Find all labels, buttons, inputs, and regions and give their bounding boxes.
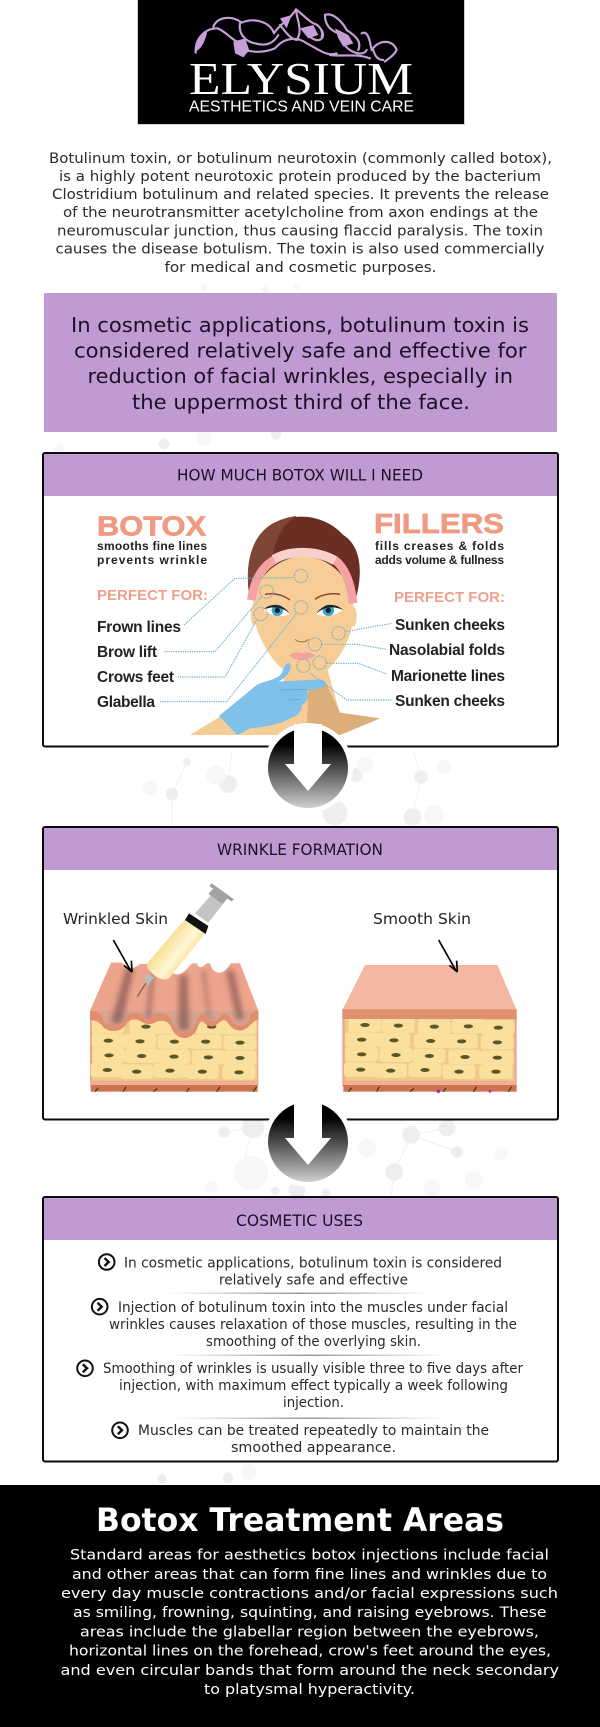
panel header: WRINKLE FORMATION (217, 840, 383, 859)
panel: wrinkle formation (43, 827, 558, 1120)
panel header (44, 828, 557, 870)
panel header (44, 454, 557, 496)
treatment areas text block: as smiling, frowning, squinting, and raising eyebrows. These (73, 1605, 546, 1621)
intro text block: neuromuscular junction, thus causing flaccid paralysis. The toxin (57, 224, 543, 240)
panel header: COSMETIC USES (236, 1211, 363, 1230)
intro text block: for medical and cosmetic purposes. (164, 260, 436, 276)
callout: cosmetic applications (44, 293, 557, 432)
label: wrinkled skin: Wrinkled Skin (63, 910, 168, 928)
botox column (97, 510, 208, 711)
bullet 2 (92, 1299, 517, 1350)
treatment areas text block: areas include the glabellar region between the eyebrows, (80, 1624, 539, 1640)
fillers column: Sunken cheeks (395, 617, 505, 634)
intro text block: Clostridium botulinum and related species. It prevents the release (52, 187, 549, 203)
treatment areas text block: to platysmal hyperactivity. (204, 1682, 415, 1698)
intro text block: of the neurotransmitter acetylcholine from axon endings at the (63, 205, 538, 221)
botox column: smooths fine lines (97, 539, 207, 553)
panel header (44, 1198, 557, 1240)
treatment areas text block: and other areas that can form fine lines and wrinkles due to (72, 1567, 547, 1583)
bullet 2: wrinkles causes relaxation of those muscles, resulting in the (109, 1317, 517, 1333)
treatment areas text block: and even circular bands that form around the neck secondary (60, 1663, 559, 1679)
leader lines and dashed target circles (160, 569, 392, 702)
bullet 2: smoothing of the overlying skin. (206, 1334, 421, 1350)
label: smooth skin: Smooth Skin (373, 910, 471, 928)
bullet 3: Smoothing of wrinkles is usually visible three to five days after (103, 1361, 523, 1377)
bullet 1: relatively safe and effective (219, 1272, 408, 1288)
callout: cosmetic applications: reduction of facial wrinkles, especially in (88, 364, 513, 388)
fillers column (374, 508, 505, 710)
panel: cosmetic uses (43, 1197, 558, 1462)
arrow: down from how much botox panel (263, 723, 353, 813)
bullet 1: In cosmetic applications, botulinum toxin is considered (124, 1255, 502, 1271)
fillers column: Sunken cheeks (395, 693, 505, 710)
logo: Elysium Aesthetics and Vein Care (138, 0, 464, 124)
fillers column: FILLERS (374, 508, 504, 539)
heading: Botox Treatment Areas (96, 1501, 504, 1539)
logo tagline: AESTHETICS AND VEIN CARE (189, 98, 414, 116)
bullet 2: Injection of botulinum toxin into the muscles under facial (118, 1300, 508, 1316)
illustration: wrinkled skin cross-section (90, 963, 258, 1092)
callout: cosmetic applications: the uppermost third of the face. (132, 390, 470, 414)
treatment areas text block (60, 1548, 559, 1698)
arrow: down from wrinkle formation panel (263, 1097, 353, 1187)
fillers column: adds volume & fullness (375, 553, 504, 567)
bullet 3: injection, with maximum effect typically a week following (119, 1378, 508, 1394)
botox column: prevents wrinkle (97, 553, 207, 567)
treatment areas text block: Standard areas for aesthetics botox injections include facial (70, 1548, 549, 1564)
intro text block: causes the disease botulism. The toxin is also used commercially (56, 242, 544, 258)
illustration: smooth skin cross-section (342, 965, 517, 1093)
bullet 4: Muscles can be treated repeatedly to maintain the (138, 1423, 489, 1439)
botox column: Frown lines (97, 619, 181, 636)
bullet 3 (77, 1360, 523, 1411)
botox column: PERFECT FOR: (97, 587, 208, 604)
intro text block: Botulinum toxin, or botulinum neurotoxin (commonly called botox), (49, 151, 552, 167)
intro text block: is a highly potent neurotoxic protein produced by the bacterium (59, 169, 541, 185)
arrow: pointing at wrinkle (113, 940, 132, 972)
panel: botox treatment areas (0, 1485, 600, 1727)
botox column: BOTOX (97, 510, 206, 542)
intro text block (49, 151, 552, 276)
fillers column: PERFECT FOR: (394, 589, 505, 606)
illustration: syringe (137, 883, 234, 997)
bullet 3: injection. (283, 1395, 344, 1411)
panel header: HOW MUCH BOTOX WILL I NEED (177, 466, 423, 484)
treatment areas text block: horizontal lines on the forehead, crow's feet around the eyes, (69, 1644, 551, 1660)
fillers column: Nasolabial folds (389, 642, 505, 659)
botox column: Brow lift (97, 644, 157, 661)
panel: how much botox will I need (43, 453, 558, 746)
botox column: Glabella (97, 694, 155, 711)
logo wordmark: ELYSIUM (189, 53, 413, 104)
icon: orchid flowers (195, 9, 397, 62)
fillers column: Marionette lines (391, 668, 505, 685)
bullet 4: smoothed appearance. (231, 1440, 396, 1456)
botox column: Crows feet (97, 669, 174, 686)
fillers column: fills creases & folds (375, 539, 504, 553)
bullet 1 (99, 1254, 502, 1288)
callout: cosmetic applications: In cosmetic applications, botulinum toxin is (71, 313, 529, 337)
illustration: woman's face with gloved hand (190, 516, 380, 735)
callout: cosmetic applications: considered relatively safe and effective for (74, 338, 527, 362)
arrow: pointing at smooth skin (439, 940, 457, 972)
treatment areas text block: every day muscle contractions and/or facial expressions such (61, 1586, 558, 1602)
bullet 4 (112, 1422, 489, 1456)
